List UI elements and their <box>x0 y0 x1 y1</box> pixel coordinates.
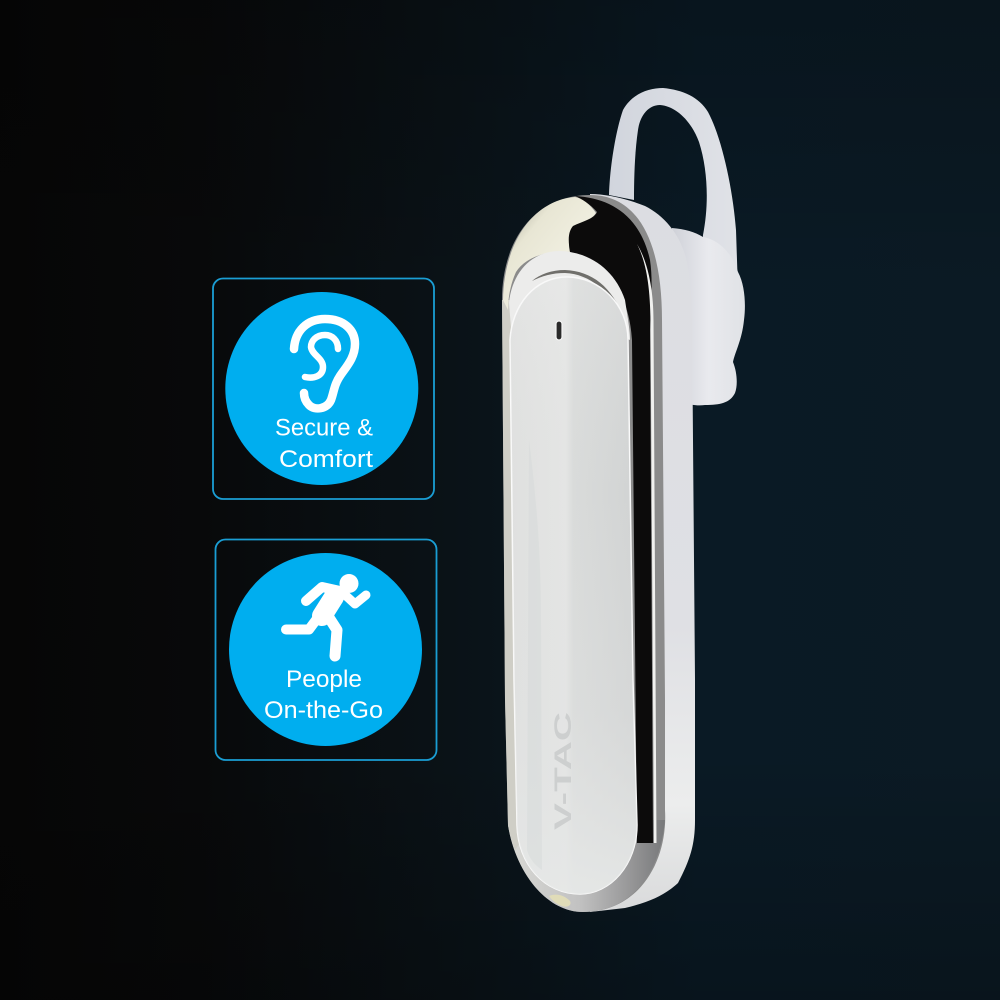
badge frame <box>216 540 436 760</box>
face reflection <box>527 440 542 870</box>
warm glint <box>549 895 571 907</box>
chrome left band <box>502 300 522 850</box>
icon: ear <box>294 319 355 408</box>
label: Secure & <box>275 414 373 442</box>
badge circle <box>225 292 418 485</box>
black mirror band <box>569 196 653 843</box>
ear bud <box>672 228 745 405</box>
face lower fade <box>510 277 637 894</box>
icon: runner <box>286 574 366 656</box>
microphone slot <box>556 321 562 340</box>
ear hook <box>609 88 738 290</box>
label: People <box>286 666 362 693</box>
badge circle <box>229 553 422 746</box>
chrome frame <box>502 195 665 912</box>
bevel shade <box>532 270 624 319</box>
label: On-the-Go <box>264 697 383 724</box>
chrome lower curve <box>508 820 665 912</box>
V-TAC logo: V-TAC <box>550 712 577 830</box>
badge: People On-the-Go <box>216 540 436 760</box>
front face panel <box>510 277 637 894</box>
product: white headset <box>502 88 745 912</box>
back shell <box>590 194 695 912</box>
badge frame <box>213 278 434 499</box>
chrome bright top-left <box>503 197 596 310</box>
white inner bevel <box>509 251 630 340</box>
badge: Secure & Comfort <box>213 278 434 499</box>
label: Comfort <box>279 446 373 473</box>
chrome bright line <box>637 244 656 843</box>
